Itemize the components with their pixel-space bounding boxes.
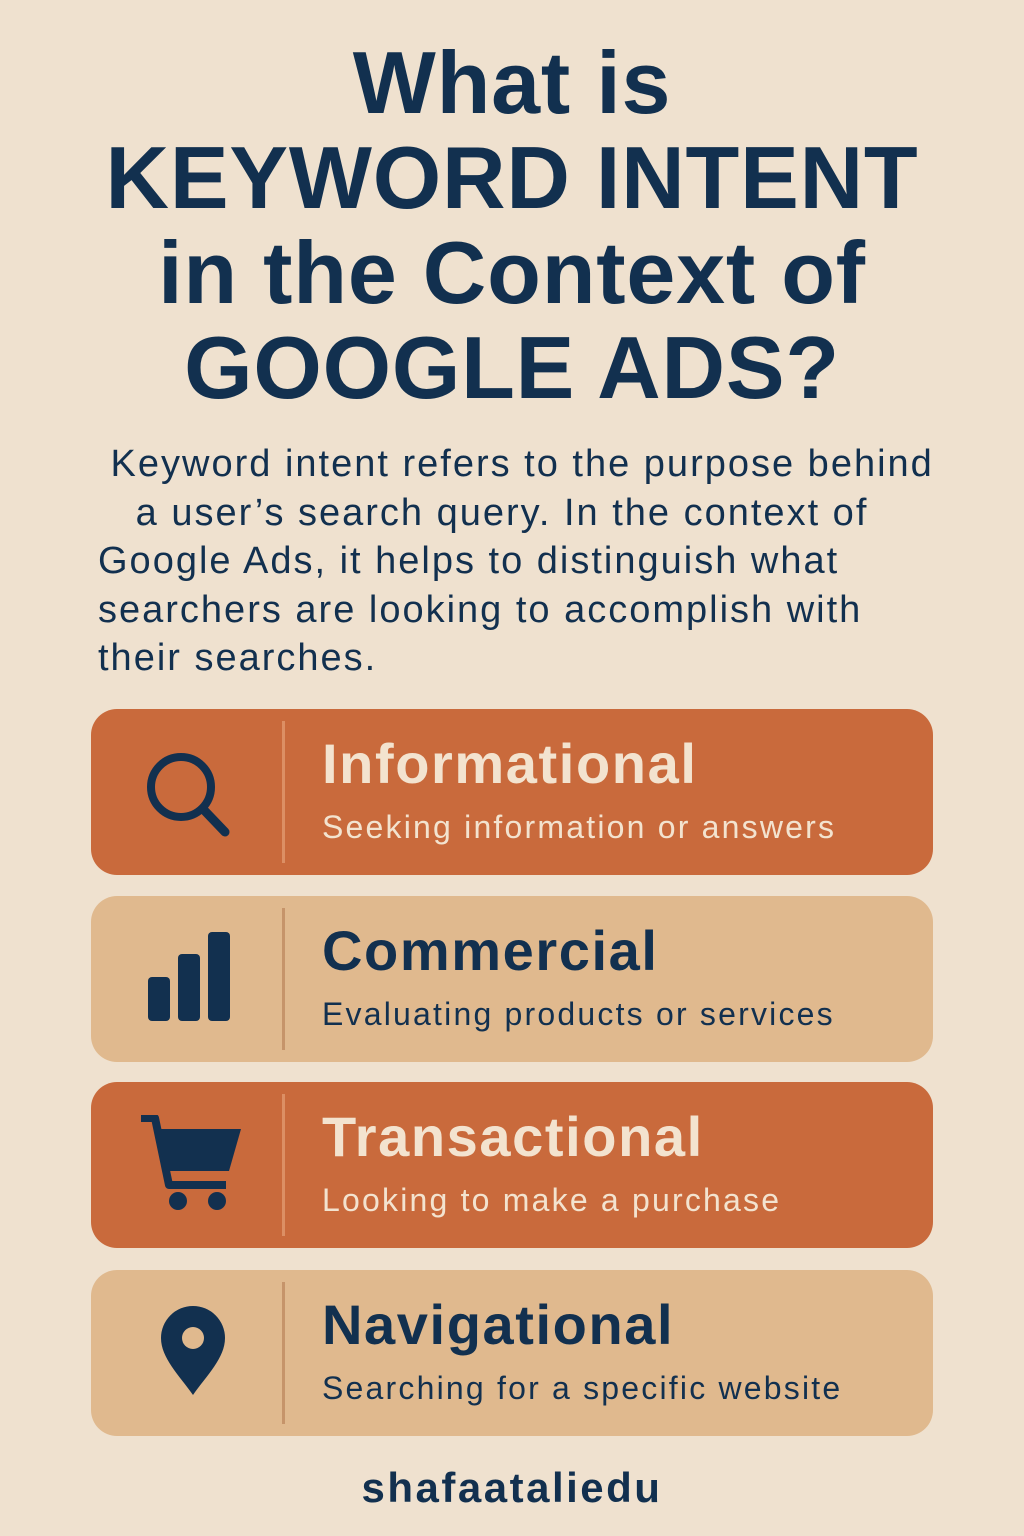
icon: cart (141, 1115, 241, 1210)
card: navigational (91, 1270, 933, 1436)
icon: magnifier (147, 753, 230, 836)
intro paragraph: Google Ads, it helps to distinguish what (98, 540, 839, 582)
heading: transactional: Transactional (322, 1105, 704, 1168)
subtitle: Seeking information or answers (322, 809, 836, 845)
subtitle: Looking to make a purchase (322, 1182, 781, 1218)
footer: shafaataliedu (362, 1464, 662, 1511)
title: GOOGLE ADS? (184, 318, 840, 417)
title: KEYWORD INTENT (106, 128, 918, 227)
card: informational (91, 709, 933, 875)
card: transactional (91, 1082, 933, 1248)
title (106, 33, 918, 417)
intro paragraph: searchers are looking to accomplish with (98, 588, 862, 630)
title: in the Context of (158, 223, 866, 322)
icon: bar chart (148, 932, 230, 1021)
intro paragraph: Keyword intent refers to the purpose behind (111, 443, 934, 485)
icon: location pin (161, 1306, 225, 1395)
intro paragraph (98, 443, 934, 679)
heading: informational: Informational (322, 732, 697, 795)
card: commercial (91, 896, 933, 1062)
heading: navigational: Navigational (322, 1293, 674, 1356)
subtitle: Searching for a specific website (322, 1370, 842, 1406)
intro paragraph: their searches. (98, 637, 377, 679)
intro paragraph: a user’s search query. In the context of (136, 492, 868, 534)
subtitle: Evaluating products or services (322, 996, 835, 1032)
title: What is (353, 33, 671, 132)
heading: commercial: Commercial (322, 919, 659, 982)
